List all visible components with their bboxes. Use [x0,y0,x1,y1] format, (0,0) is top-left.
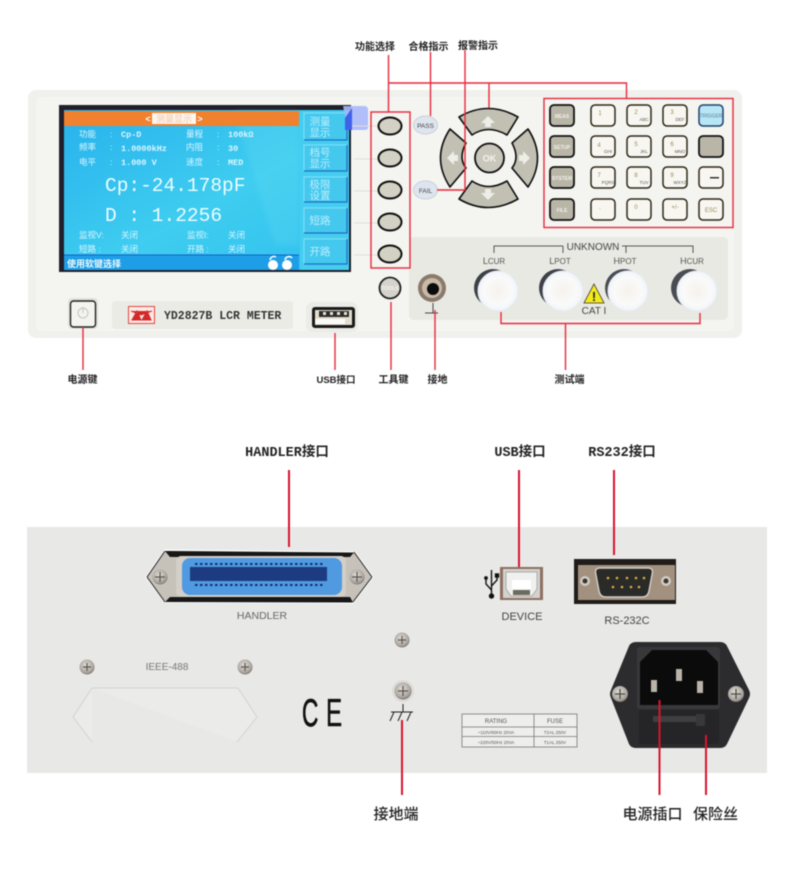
UNKNOWN label and bracket [494,242,693,253]
terminal labels [483,256,704,266]
GPIB cover plate [73,688,257,742]
screen parameters: 1.000 V [121,158,158,168]
rating and fuse table: ~220V/50Hz 20VA [478,740,514,745]
soft keys: 设置 [310,190,330,202]
screen parameters: 功能 [79,129,97,139]
keypad: PQRS [602,180,614,185]
name plate [112,301,293,329]
screen parameters: MED [228,158,243,168]
screen status: 监视I: [187,230,209,240]
label: 电源键: 电源键 [68,373,98,386]
ground jack [418,274,446,313]
text: HANDLER: HANDLER [237,610,288,622]
CE mark: E [326,691,342,734]
keypad: ESC [705,208,718,214]
name plate: YD2827B LCR METER [164,310,281,323]
soft keys [300,111,349,270]
label: HANDLER接口: HANDLER接口 [245,444,329,461]
panel: LCD screen [59,105,368,272]
keypad: +/- [671,205,679,211]
keypad [550,105,723,220]
screen parameters: 100kΩ [228,130,254,140]
label: RS232接口: RS232接口 [588,444,656,461]
screen parameters: : [217,129,219,139]
screen reading Cp: Cp:-24.178pF [105,175,245,197]
keypad: WXYZ [674,180,687,185]
screen status: 关闭 [121,244,138,254]
screen title bar: < [145,114,151,124]
keypad: ABC [639,117,649,122]
rating and fuse table: ~110V/60Hz 20VA [478,730,514,735]
CE mark [302,691,342,735]
keypad: TUV [640,180,648,185]
keypad: 2 [634,110,638,116]
keypad: TRIGGER [700,114,723,120]
power socket module [610,642,750,748]
screen parameters: 频率 [79,142,97,152]
screen title bar: > [197,114,203,124]
test terminal panel [409,237,728,320]
USB icon [485,570,498,598]
keypad: GHI [604,149,612,154]
soft keys: 短路 [310,214,331,227]
keypad: . [599,205,601,211]
warning icon: CAT I [582,306,606,317]
logo [128,306,154,324]
text: IEEE-488: IEEE-488 [146,662,189,673]
screen parameters: 速度 [186,157,204,167]
callout lines: front panel [83,50,733,370]
rear screws [80,632,410,674]
screen parameters: : [217,142,219,152]
keypad: 8 [634,173,638,179]
screen footer: 使用软键选择 [67,258,121,269]
terminal labels: HCUR [680,256,704,266]
warning icon [582,284,606,317]
text: DEVICE: DEVICE [502,611,542,623]
terminal labels: LCUR [483,256,505,266]
rating and fuse table: RATING [485,719,507,725]
screen status: 关闭 [228,244,245,254]
label: USB接口 front: USB接口 [316,374,356,386]
PASS indicator [414,116,438,134]
keypad: MEAS [555,114,570,120]
terminal labels: HPOT [614,256,637,266]
callout lines: rear panel [289,470,706,795]
soft keys: 测量 [310,115,331,128]
label: 合格指示: 合格指示 [408,40,448,53]
screen status [79,230,245,254]
tools button: TOOLS [381,286,399,292]
label: 接地: 接地 [428,373,448,386]
rating and fuse table: T2AL 250V [544,730,566,735]
screen parameters: : [110,157,112,167]
keypad: SYSTEM [552,176,572,182]
keypad: 3 [670,110,674,116]
screen title bar: 测量显示 [156,114,192,124]
screen parameters: : [217,157,219,167]
FAIL indicator [414,181,438,199]
screen status: 短路 : [79,244,101,254]
UNKNOWN label and bracket: UNKNOWN [567,242,619,253]
connectors [474,269,717,311]
FAIL indicator: FAIL [419,188,433,195]
keypad: 5 [634,142,638,148]
ground terminal [390,680,414,721]
PASS indicator: PASS [417,123,435,130]
soft keys: 极限 [310,178,331,191]
screen parameters: 30 [228,144,238,154]
soft keys: 开路 [310,245,331,258]
power button [68,298,98,329]
label: 测试端: 测试端 [554,373,584,386]
rating and fuse table: T1AL 250V [544,740,566,745]
USB B port [500,567,543,600]
soft keys: 显示 [310,127,330,139]
keypad: 1 [598,111,602,117]
screen title bar [64,111,299,126]
keypad: 9 [670,173,674,179]
navigation pad [440,108,538,208]
screen parameters: : [110,129,112,139]
text: RS-232C: RS-232C [604,615,650,627]
keypad: 0 [634,205,638,211]
terminal labels: LPOT [549,256,571,266]
panel: front panel of instrument [28,90,742,338]
keypad: FILE [557,208,568,214]
label: 报警指示: 报警指示 [458,39,498,52]
soft key buttons [352,118,402,262]
keypad: JKL [640,149,648,154]
label: 电源插口: 电源插口 [622,806,683,823]
screen status: 监视V: [79,230,104,240]
keypad: MNO [675,149,686,154]
tools button [380,278,400,298]
keypad: 4 [597,143,601,149]
keypad: SETUP [554,145,571,151]
rating and fuse table: FUSE [547,719,563,725]
OK button: OK [483,154,497,164]
keypad: 6 [670,142,674,148]
screen status: 关闭 [121,230,138,240]
screen footer [64,255,299,270]
screen parameters [79,129,254,168]
warning icon: ! [592,289,596,304]
screen parameters: Cp-D [121,130,141,140]
label: 工具键: 工具键 [378,373,408,386]
CE mark: C [302,691,318,735]
screen status: 关闭 [228,230,245,240]
screen parameters: 内阻 [186,142,204,152]
label: 接地端: 接地端 [373,806,419,823]
soft keys: 档号 [310,146,330,159]
RS-232 port [574,559,676,604]
label: USB接口 rear: USB接口 [494,444,546,461]
rating and fuse table [462,714,577,747]
soft keys: 显示 [310,158,330,170]
screen parameters: : [110,142,112,152]
screen parameters: 量程 [186,129,204,139]
keypad: DEF [676,117,685,122]
USB port [306,302,358,332]
panel: rear panel of instrument [27,527,767,773]
label: 保险丝: 保险丝 [693,805,738,823]
HANDLER connector [146,550,373,603]
screen parameters: 1.0000kHz [121,144,167,154]
screen protective film tab [343,106,368,130]
screen reading D: D : 1.2256 [105,205,222,227]
screen parameters: 电平 [79,157,97,167]
screen status: 开路 : [187,244,209,254]
keypad: 7 [597,173,601,179]
label: 功能选择: 功能选择 [355,40,395,53]
